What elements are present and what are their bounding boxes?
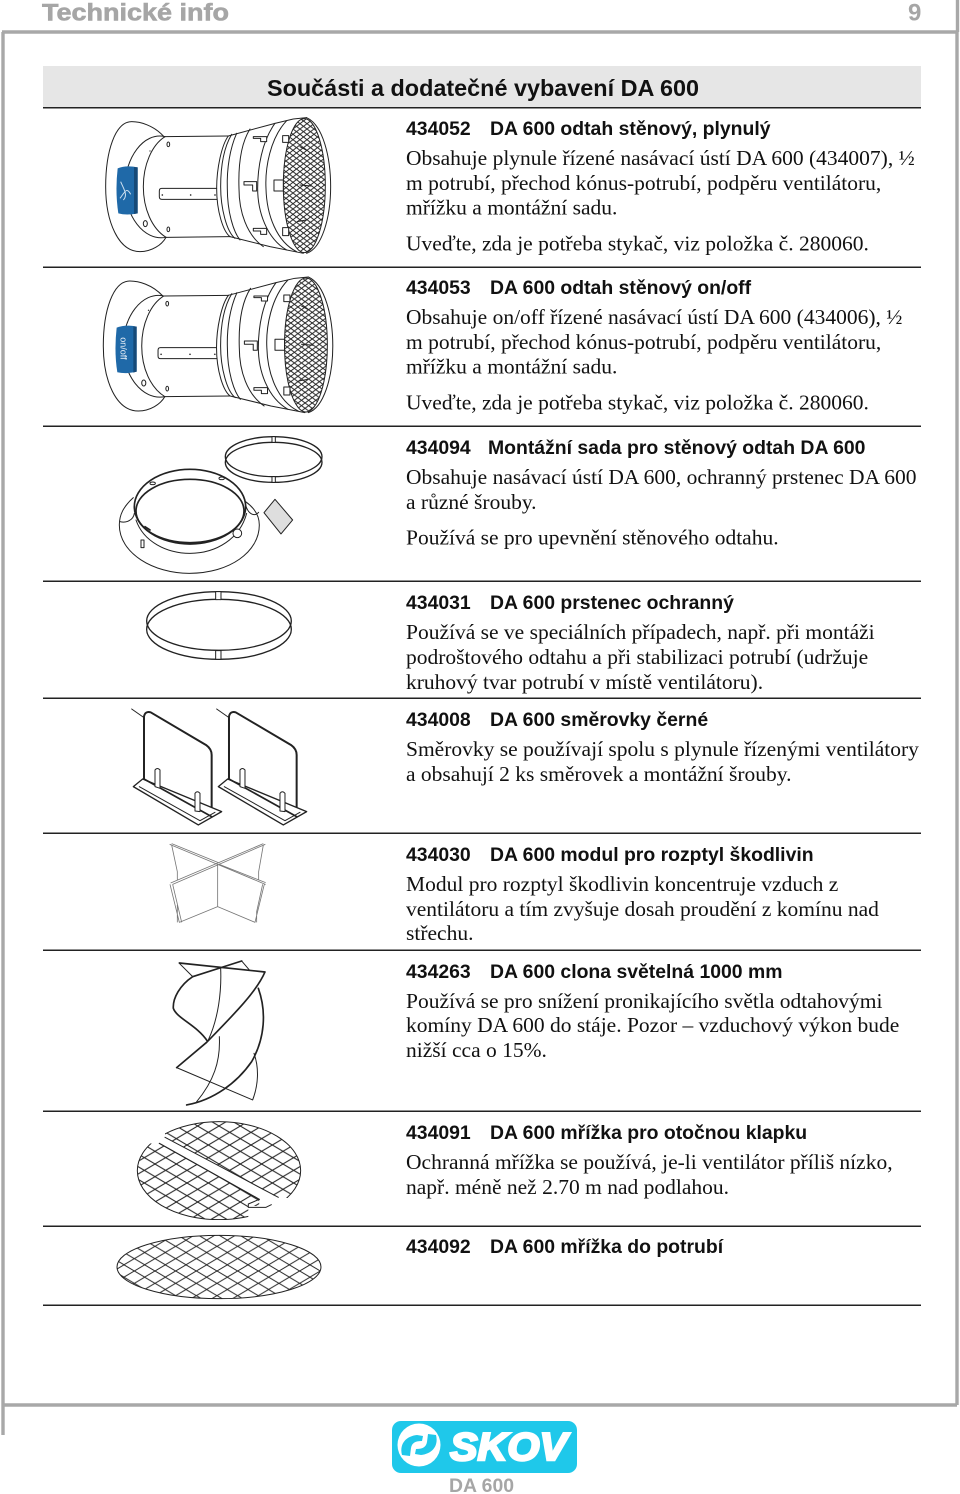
illustration: smooth-controlled wall outlet bbox=[106, 118, 331, 253]
item 434263: nižší cca o 15%. bbox=[406, 1038, 547, 1062]
item 434094: Montážní sada pro stěnový odtah DA 600 bbox=[488, 437, 865, 459]
item 434263: Používá se pro snížení pronikajícího světla odtahovými bbox=[406, 989, 883, 1013]
title band bbox=[43, 66, 921, 108]
item 434053: m potrubí, přechod kónus-potrubí, podpěru ventilátoru, bbox=[406, 330, 881, 354]
item 434091: 434091 bbox=[406, 1122, 471, 1144]
illustration: flap grille bbox=[137, 1122, 301, 1220]
item 434094: Používá se pro upevnění stěnového odtahu. bbox=[406, 526, 779, 550]
logo: SKOV bbox=[392, 1421, 577, 1473]
item 434008: 434008 bbox=[406, 709, 471, 731]
item 434094 bbox=[406, 437, 917, 550]
item 434092: DA 600 mřížka do potrubí bbox=[490, 1236, 724, 1258]
item 434053: Obsahuje on/off řízené nasávací ústí DA 600 (434006), ½ bbox=[406, 305, 902, 329]
item 434031: kruhový tvar potrubí v místě ventilátoru). bbox=[406, 670, 763, 694]
item 434031: Používá se ve speciálních případech, např. při montáži bbox=[406, 620, 875, 644]
item 434008: DA 600 směrovky černé bbox=[490, 709, 708, 731]
illustration: on/off wall outlet: on/off bbox=[119, 337, 129, 360]
item 434094: 434094 bbox=[406, 437, 471, 459]
item 434094: a různé šrouby. bbox=[406, 490, 537, 514]
item 434052: Uveďte, zda je potřeba stykač, viz položka č. 280060. bbox=[406, 232, 869, 256]
item 434053: mřížku a montážní sadu. bbox=[406, 354, 617, 378]
item 434263 bbox=[406, 961, 899, 1062]
item 434008 bbox=[406, 709, 919, 786]
item 434091 bbox=[406, 1122, 893, 1199]
illustration: pollutant dispersion module bbox=[170, 844, 266, 922]
item 434030: DA 600 modul pro rozptyl škodlivin bbox=[490, 844, 814, 866]
item 434030: Modul pro rozptyl škodlivin koncentruje vzduch z bbox=[406, 872, 838, 896]
item 434052 bbox=[406, 118, 915, 256]
item 434008: Směrovky se používají spolu s plynule řízenými ventilátory bbox=[406, 737, 919, 761]
item 434263: komíny DA 600 do stáje. Pozor – vzduchový výkon bude bbox=[406, 1013, 899, 1037]
item 434031: podroštového odtahu a při stabilizaci potrubí (udržuje bbox=[406, 645, 868, 669]
illustration: mounting kit bbox=[119, 437, 322, 573]
item 434052: 434052 bbox=[406, 118, 471, 140]
illustration: on/off wall outlet bbox=[103, 277, 333, 413]
item 434031: DA 600 prstenec ochranný bbox=[490, 592, 734, 614]
item 434053: Uveďte, zda je potřeba stykač, viz položka č. 280060. bbox=[406, 390, 869, 414]
item 434030: 434030 bbox=[406, 844, 471, 866]
item 434052: mřížku a montážní sadu. bbox=[406, 196, 617, 220]
illustration: duct grille bbox=[117, 1235, 321, 1299]
illustration: black guide vanes bbox=[132, 709, 307, 825]
item 434030 bbox=[406, 844, 879, 945]
item 434031: 434031 bbox=[406, 592, 471, 614]
illustration: protective ring bbox=[147, 592, 291, 659]
item 434008: a obsahují 2 ks směrovek a montážní šrouby. bbox=[406, 762, 792, 786]
item 434263: DA 600 clona světelná 1000 mm bbox=[490, 961, 782, 983]
item 434091: DA 600 mřížka pro otočnou klapku bbox=[490, 1122, 807, 1144]
logo: SKOV: SKOV bbox=[450, 1426, 570, 1469]
item 434052: Obsahuje plynule řízené nasávací ústí DA 600 (434007), ½ bbox=[406, 146, 915, 170]
item 434052: DA 600 odtah stěnový, plynulý bbox=[490, 118, 771, 140]
item 434263: 434263 bbox=[406, 961, 471, 983]
item 434053: 434053 bbox=[406, 277, 471, 299]
title band: Součásti a dodatečné vybavení DA 600 bbox=[267, 75, 699, 101]
item 434053 bbox=[406, 277, 902, 414]
page header: section name: Technické info bbox=[42, 0, 229, 26]
item 434052: m potrubí, přechod kónus-potrubí, podpěru ventilátoru, bbox=[406, 171, 881, 195]
item 434030: ventilátoru a tím zvyšuje dosah proudění z komínu nad bbox=[406, 897, 879, 921]
illustration: light baffle bbox=[173, 961, 265, 1105]
item 434094: Obsahuje nasávací ústí DA 600, ochranný prstenec DA 600 bbox=[406, 465, 917, 489]
item 434091: např. méně než 2.70 m nad podlahou. bbox=[406, 1175, 729, 1199]
item 434030: střechu. bbox=[406, 921, 473, 945]
item 434092: 434092 bbox=[406, 1236, 471, 1258]
item 434031 bbox=[406, 592, 875, 694]
item 434053: DA 600 odtah stěnový on/off bbox=[490, 277, 752, 299]
page number: 9 bbox=[908, 0, 921, 26]
item 434091: Ochranná mřížka se používá, je-li ventilátor příliš nízko, bbox=[406, 1150, 893, 1174]
